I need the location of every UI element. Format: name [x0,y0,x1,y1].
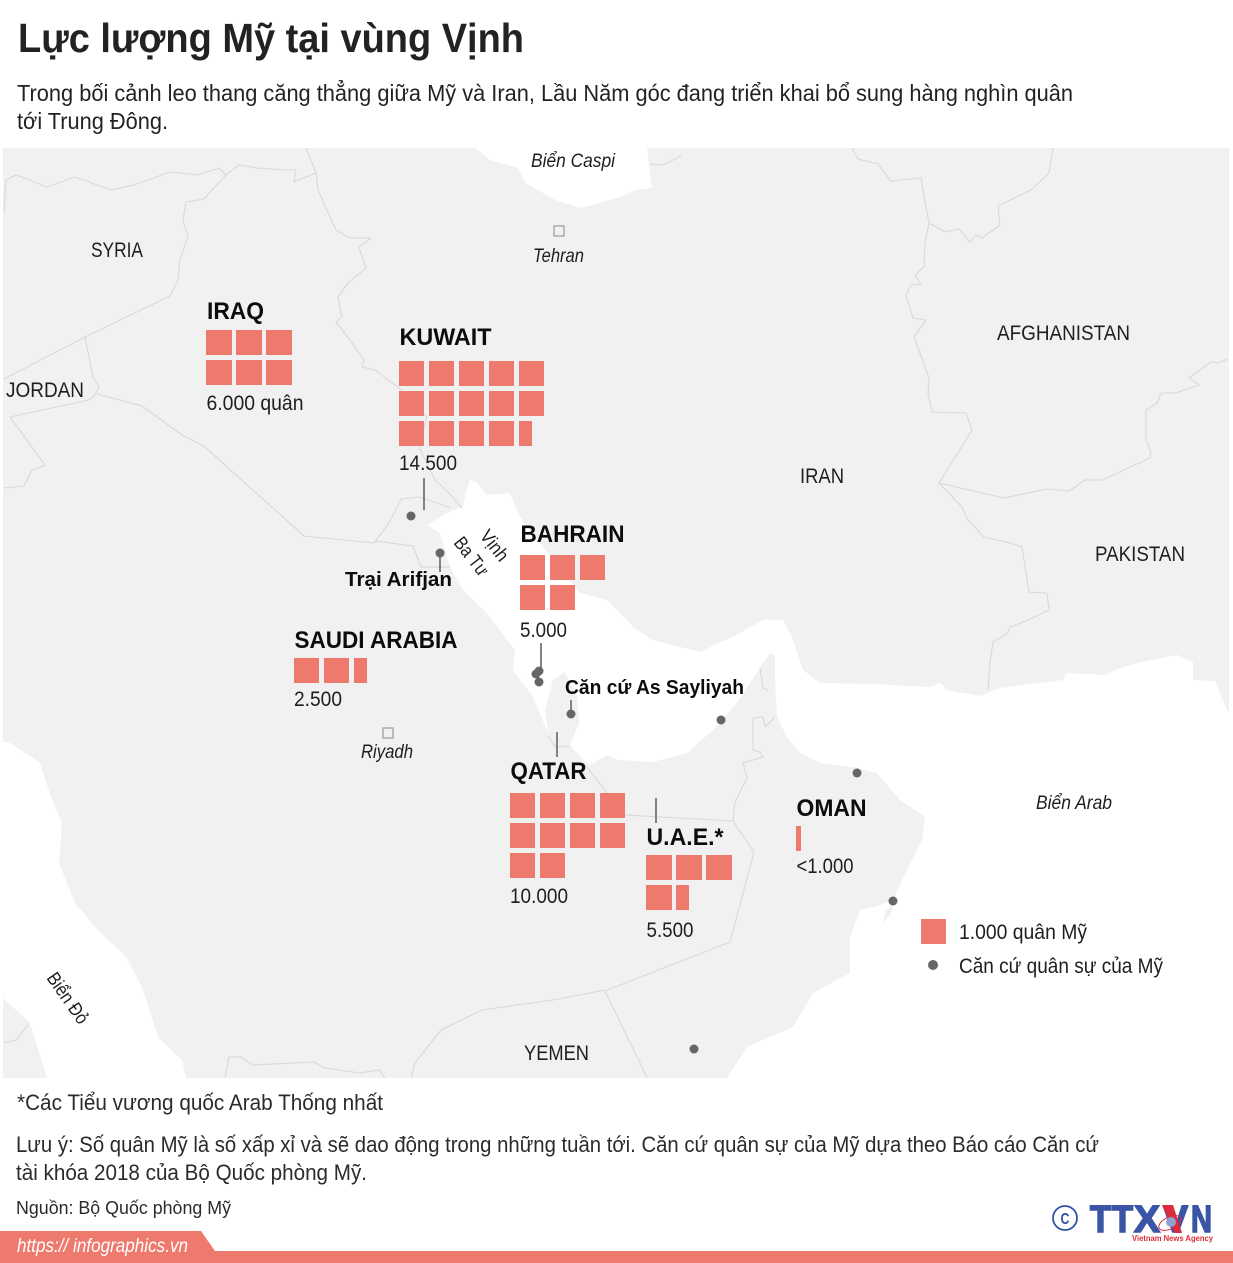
subtitle: tới Trung Đông. [17,108,168,134]
subtitle: Trong bối cảnh leo thang căng thẳng giữa Mỹ và Iran, Lầu Năm góc đang triển khai bổ sung hàng nghìn quân [17,78,1073,106]
panel: Qatar [510,758,625,908]
rotated label: Vịnh Ba Tư: Vịnh [475,526,513,566]
military base markers [406,478,898,1054]
title: Lực lượng Mỹ tại vùng Vịnh [18,15,524,61]
legend: Căn cứ quân sự của Mỹ [959,955,1163,978]
logo: TTXVN: T [1112,1199,1133,1241]
panel: Saudi Arabia: 2.500 [294,688,342,711]
country labels: PAKISTAN [1095,543,1185,566]
city marker: Tehran [554,226,564,236]
water: Red Sea [3,742,186,1078]
panel: Oman: <1.000 [796,855,854,878]
country labels: YEMEN [524,1042,589,1065]
country labels [6,239,1185,1065]
land background [3,148,1229,1078]
water: Persian Gulf and Arabian Sea [427,480,1229,1078]
footer bar [0,1231,1233,1263]
panel: Saudi Arabia: SAUDI ARABIA [294,627,458,654]
base label: Camp Arifjan: Trại Arifjan [345,568,452,591]
panel: Bahrain: BAHRAIN [520,521,624,548]
panel: Saudi Arabia [294,627,458,711]
island: Masirah [883,904,893,923]
panel: Kuwait: KUWAIT [400,324,492,351]
panel: Bahrain [520,521,624,642]
panel: UAE [646,824,732,942]
rotated label: Vịnh Ba Tư [449,526,513,581]
note [16,1132,1099,1185]
footnote: *Các Tiểu vương quốc Arab Thống nhất [17,1090,383,1115]
panel: Iraq: 6.000 quân [206,392,304,415]
sea and city labels: Biển Arab [1036,793,1112,814]
panel: Oman [796,795,866,878]
country labels: AFGHANISTAN [997,322,1130,345]
panel: Qatar: 10.000 [510,885,568,908]
panel: Oman: OMAN [796,795,866,822]
logo: TTXVN: T [1090,1199,1111,1241]
sea and city labels: Biển Caspi [531,151,616,172]
source: Nguồn: Bộ Quốc phòng Mỹ [16,1197,232,1218]
country borders [4,148,1228,1078]
water: Caspian Sea [475,148,652,208]
logo: TTXVN: X [1134,1199,1161,1241]
note: Lưu ý: Số quân Mỹ là số xấp xỉ và sẽ dao động trong những tuần tới. Căn cứ quân sự của Mỹ dựa theo Báo cáo Căn cứ [16,1132,1099,1157]
rotated label: Biển Đỏ: Biển Đỏ [42,969,92,1028]
sea and city labels: Riyadh [361,742,413,763]
logo: TTXVN: N [1191,1199,1212,1241]
panel: Kuwait: 14.500 [399,452,457,475]
panel: Kuwait [399,324,544,475]
logo: copyright: C [1060,1211,1070,1228]
logo: TTXVN: V [1163,1199,1189,1241]
subtitle [17,78,1073,134]
base label: As Sayliyah: Căn cứ As Sayliyah [565,676,744,699]
logo: TTXVN: Vietnam News Agency [1132,1234,1214,1243]
panel: Iraq: IRAQ [207,298,264,325]
legend [921,919,1163,978]
panel: UAE: U.A.E.* [646,824,724,851]
country labels: JORDAN [6,379,84,402]
country labels: IRAN [800,465,844,488]
rotated label: Vịnh Ba Tư: Ba Tư [449,533,493,581]
panel: Bahrain: 5.000 [520,619,567,642]
legend: 1.000 quân Mỹ [959,921,1087,944]
map [3,148,1229,1078]
panel: Iraq [206,298,304,415]
city marker: Riyadh [383,728,393,738]
panel: UAE: 5.500 [646,919,694,942]
sea and city labels: Tehran [533,246,584,267]
footer url: https:// infographics.vn [17,1236,188,1257]
country labels: SYRIA [91,239,143,262]
panel: Qatar: QATAR [510,758,586,785]
sea and city labels [361,151,1112,814]
logo: TTXVN [1090,1199,1214,1243]
logo: copyright [1053,1206,1077,1230]
note: tài khóa 2018 của Bộ Quốc phòng Mỹ. [16,1160,367,1185]
